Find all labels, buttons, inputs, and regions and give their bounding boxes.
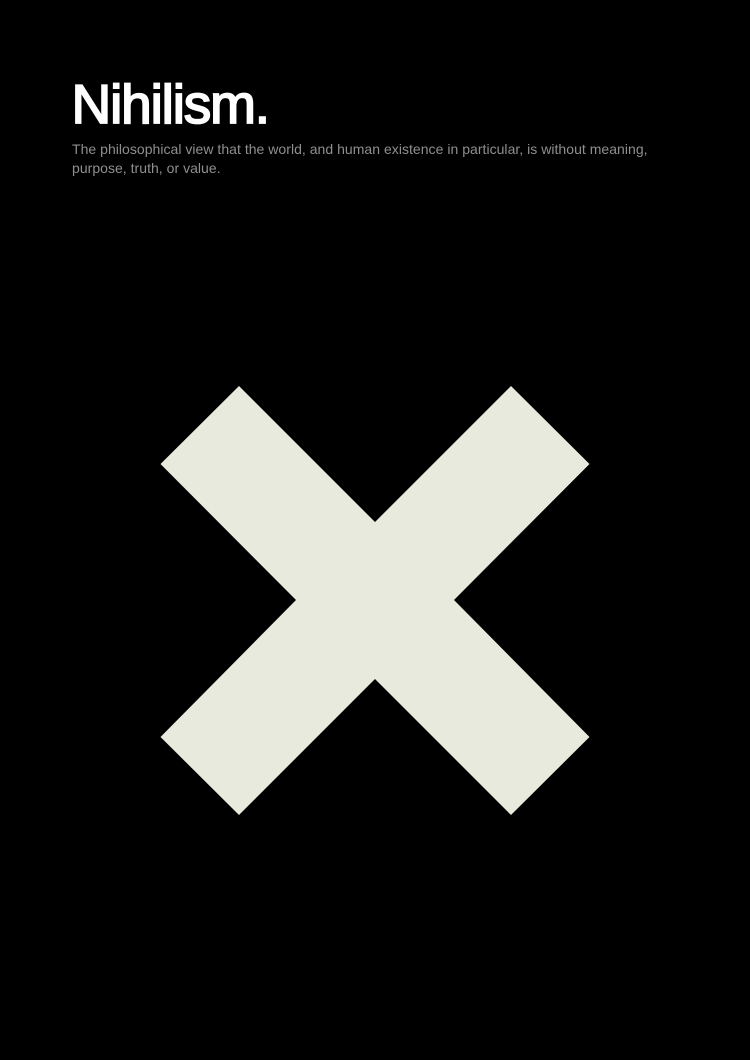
description text: purpose, truth, or value. — [72, 160, 221, 176]
description text — [72, 141, 648, 176]
title: Nihilism. — [72, 73, 269, 135]
description text: The philosophical view that the world, and human existence in particular, is without meaning, — [72, 141, 648, 157]
